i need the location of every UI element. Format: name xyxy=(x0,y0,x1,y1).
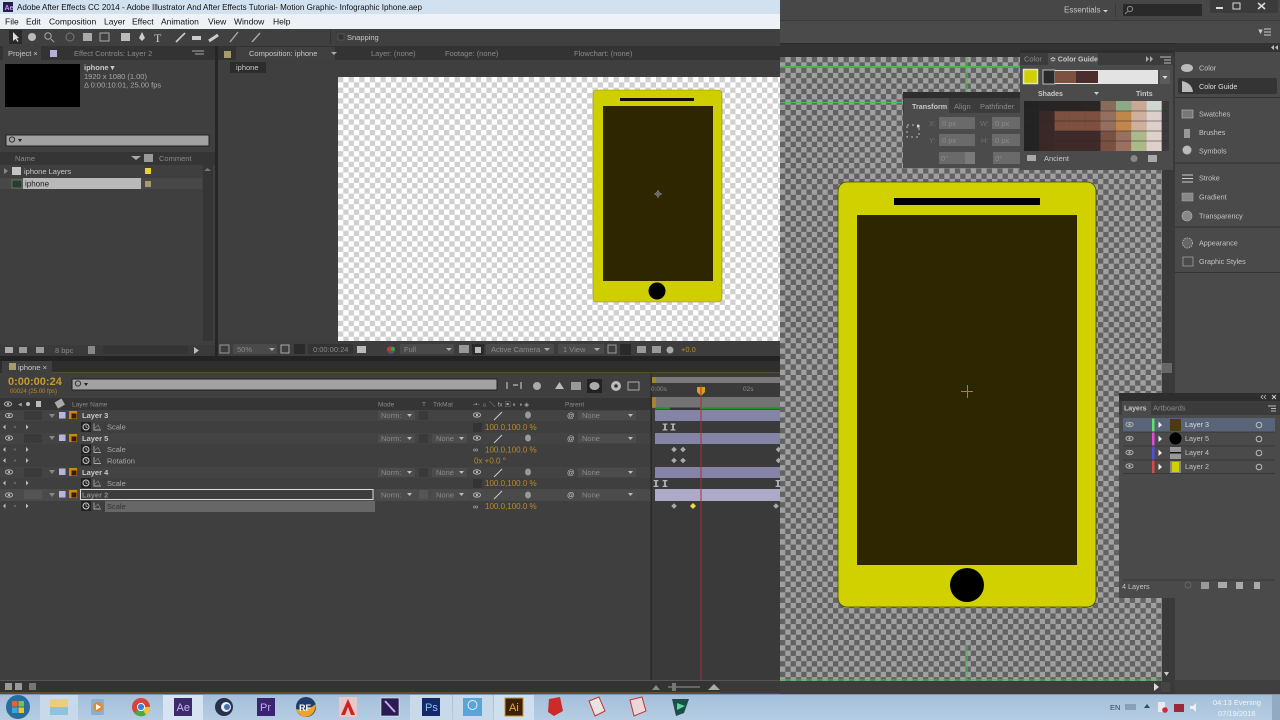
composition panel: Layer: (none) xyxy=(371,49,416,58)
dock item: Appearance xyxy=(1182,238,1238,248)
system tray: EN xyxy=(1110,703,1120,712)
layer row: Layer 4: Layer 4 xyxy=(82,468,109,477)
composition viewer footer: 50% xyxy=(237,345,252,354)
color guide panel: Tints xyxy=(1136,91,1153,98)
property row: Layer 2 Scale selected: 100.0,100.0 % xyxy=(485,502,537,511)
time ruler xyxy=(651,377,780,410)
layer row: Layer 5: None xyxy=(582,434,600,443)
After Effects menu bar: Help xyxy=(273,16,291,26)
transform panel: Y: xyxy=(929,136,936,145)
After Effects toolbar: T xyxy=(154,31,162,45)
timeline panel xyxy=(0,373,780,680)
After Effects menu bar: Layer xyxy=(104,16,125,26)
iPhone artwork in Illustrator xyxy=(838,182,1096,607)
layer row: Layer 3: None xyxy=(582,411,600,420)
dock item: Brushes: Brushes xyxy=(1199,128,1226,137)
timeline switches toolbar xyxy=(507,379,639,393)
layer row: Layer 2 selected: Layer 2 xyxy=(82,490,108,500)
layer row: Layer 2 selected: None xyxy=(582,490,600,500)
composition details xyxy=(84,63,161,90)
window buttons xyxy=(1210,0,1278,13)
layers panel: Layers xyxy=(1124,406,1147,412)
system tray: 04:13 Evening xyxy=(1213,698,1261,707)
icon: RF xyxy=(296,697,316,717)
layer row: Layer 4: Norm: xyxy=(381,468,401,477)
layer column headers: Layer Name xyxy=(72,402,108,408)
current time display: 0:00:00:24 xyxy=(8,376,63,388)
canvas scrollbars xyxy=(780,363,1172,694)
layer entry: Layer 5 xyxy=(1126,432,1262,446)
time ruler: 02s xyxy=(743,386,754,393)
layer column headers: ◂ xyxy=(18,400,22,408)
property row: Layer 5 Scale: ∞ xyxy=(473,447,478,454)
dock item: Gradient: Gradient xyxy=(1199,192,1227,202)
color guide panel xyxy=(1020,50,1173,170)
time ruler: 0:00s xyxy=(651,386,668,393)
icon: Illustrator: Ai xyxy=(509,702,519,714)
composition details: Δ 0:00:10:01, 25.00 fps xyxy=(84,80,161,90)
property row: Layer 4 Scale xyxy=(3,478,537,488)
property row: Layer 4 Scale: Scale xyxy=(107,479,126,488)
icon: Illustrator xyxy=(494,695,534,720)
dock item: Color: Color xyxy=(1199,64,1217,72)
dock item: Appearance: Appearance xyxy=(1199,238,1238,248)
icon: weather app xyxy=(453,695,493,720)
property row: Layer 5 Rotation: 0x +0.0 ° xyxy=(474,456,506,466)
property row: Layer 3 Scale xyxy=(3,422,537,432)
project search xyxy=(6,135,209,146)
layer row: Layer 2 selected: @ xyxy=(567,490,575,500)
icon: RF: RF xyxy=(299,703,311,713)
After Effects menu bar: Edit xyxy=(26,16,41,26)
composition panel: Composition: iphone xyxy=(249,49,317,58)
property row: Layer 5 Rotation xyxy=(3,456,506,466)
icon: Photoshop xyxy=(410,695,452,720)
layer entry: Layer 2: Layer 2 xyxy=(1185,462,1209,471)
property row: Layer 4 Scale: 100.0,100.0 % xyxy=(485,479,537,488)
After Effects menu bar: Composition xyxy=(49,16,97,26)
icon: Premiere: Pr xyxy=(260,702,271,714)
project panel xyxy=(0,46,215,357)
transform panel: X: xyxy=(929,119,936,128)
composition viewer footer: 1 View xyxy=(563,345,586,354)
layer row: Layer 3: @ xyxy=(567,411,575,420)
layer row: Layer 2 selected xyxy=(0,489,651,501)
layer row: Layer 4: None xyxy=(436,468,454,477)
harmony strip xyxy=(1043,70,1170,84)
current time display: 00024 (25.00 fps) xyxy=(10,389,57,395)
transform panel: Transform xyxy=(912,102,947,111)
project column headers xyxy=(0,152,215,165)
dock item: Color Guide xyxy=(1178,78,1277,94)
variation grid xyxy=(1024,101,1169,151)
After Effects menu bar xyxy=(0,14,780,29)
layer entry: Layer 4 xyxy=(1126,446,1262,460)
composition details: 1920 x 1080 (1.00) xyxy=(84,72,147,81)
transform panel: 0 px xyxy=(942,136,956,145)
project panel: Effect Controls: Layer 2 xyxy=(74,49,152,58)
layer row: Layer 4: None xyxy=(582,468,600,477)
Illustrator canvas: transparency grid xyxy=(780,57,1162,681)
current time display xyxy=(8,376,63,395)
workspace search xyxy=(1123,4,1202,16)
composition breadcrumb tab xyxy=(230,62,266,73)
After Effects menu bar: Animation xyxy=(161,16,199,26)
property row: Layer 5 Scale: Scale xyxy=(107,445,126,454)
After Effects menu bar: Effect xyxy=(132,16,154,26)
After Effects menu bar: File xyxy=(5,16,19,26)
transform panel: Pathfinder xyxy=(980,102,1015,111)
composition canvas: transparency grid xyxy=(338,77,780,341)
system tray xyxy=(1110,695,1280,720)
dock item: Stroke xyxy=(1182,174,1220,182)
artboard guides xyxy=(780,57,1162,680)
Illustrator application bar xyxy=(780,0,1280,20)
property row: Layer 5 Scale: 100.0,100.0 % xyxy=(485,446,537,454)
composition viewer footer: +0.0 xyxy=(681,345,696,354)
icon: video editor xyxy=(672,699,689,716)
dock item: Gradient xyxy=(1182,192,1227,202)
dock item: Symbols xyxy=(1182,146,1227,156)
dock item: Brushes xyxy=(1184,128,1226,138)
composition panel: Footage: (none) xyxy=(445,49,499,58)
dock item: Symbols: Symbols xyxy=(1199,146,1227,156)
timeline panel tab xyxy=(0,361,780,374)
layer row: Layer 4: @ xyxy=(567,468,575,477)
transform panel: H: xyxy=(981,136,988,145)
dock item: Color Guide: Color Guide xyxy=(1199,82,1237,91)
color guide panel: Shades xyxy=(1038,91,1063,98)
dock item: Swatches xyxy=(1182,110,1231,118)
iPhone artwork in composition xyxy=(593,90,722,302)
icon: SketchUp style builder xyxy=(630,697,646,716)
property row: Layer 5 Rotation: Rotation xyxy=(107,456,135,466)
composition panel: Flowchart: (none) xyxy=(574,49,633,58)
transform panel: Align xyxy=(954,102,971,111)
layer row: Layer 2 selected: None xyxy=(436,490,454,500)
color guide panel: Color xyxy=(1024,54,1042,64)
layer row: Layer 4 xyxy=(0,467,651,478)
icon: media player xyxy=(91,699,104,715)
composition details: iphone ▾ xyxy=(84,63,116,72)
layer column headers: Mode xyxy=(378,402,395,408)
icon: Premiere xyxy=(257,698,275,716)
icon: InDesign-style app xyxy=(381,698,399,716)
property row: Layer 2 Scale selected: Scale xyxy=(107,502,126,511)
layer row: Layer 3: Layer 3 xyxy=(82,411,108,420)
property row: Layer 3 Scale: 100.0,100.0 % xyxy=(485,423,537,432)
layer column headers xyxy=(0,398,651,410)
timeline graph area xyxy=(650,373,781,680)
composition viewer footer: Full xyxy=(404,345,416,354)
project column headers: Name xyxy=(15,154,35,163)
project item: iphone composition xyxy=(0,178,202,189)
layer column headers: Parent xyxy=(565,402,584,408)
layer column headers: TrkMat xyxy=(433,402,453,408)
property row: Layer 2 Scale selected: ∞ xyxy=(473,504,478,511)
icon: file explorer xyxy=(40,695,78,720)
composition breadcrumb tab: iphone xyxy=(236,63,259,72)
layer column headers: -•- ☼ ＼ fx ▣ ◐ ◑ ◈ xyxy=(473,400,530,408)
system tray: 07/19/2016 xyxy=(1218,709,1256,718)
composition viewer footer: Active Camera xyxy=(491,345,541,354)
layer entry: Layer 3 xyxy=(1123,418,1275,432)
transform panel: 0 px xyxy=(942,119,956,128)
After Effects title bar xyxy=(0,0,780,14)
composition panel xyxy=(218,46,780,341)
composition viewer footer: 0:00:00:24 xyxy=(313,345,348,354)
icon: AutoCAD xyxy=(339,697,357,717)
project panel: 8 bpc xyxy=(55,346,74,355)
layer row: Layer 5: Norm: xyxy=(381,434,401,443)
project column headers: Comment xyxy=(159,154,192,163)
transform panel xyxy=(903,92,1021,168)
timeline panel tab: iphone × xyxy=(18,363,47,372)
project panel: Project × xyxy=(8,49,38,58)
Illustrator control bar xyxy=(780,20,1280,43)
layer entry: Layer 5: Layer 5 xyxy=(1185,434,1209,443)
Windows taskbar xyxy=(0,694,1280,720)
icon: chrome xyxy=(132,698,150,716)
transform panel: 0 px xyxy=(995,136,1009,145)
icon: Photoshop: Ps xyxy=(425,702,438,714)
layer row: Layer 2 selected: Norm: xyxy=(381,490,401,500)
project item: iphone composition: iphone xyxy=(25,180,50,188)
dock item: Color xyxy=(1181,64,1217,72)
After Effects toolbar xyxy=(0,29,780,46)
layer entry: Layer 4: Layer 4 xyxy=(1185,448,1209,457)
dock item: Graphic Styles: Graphic Styles xyxy=(1199,257,1246,266)
composition viewer footer xyxy=(218,341,780,356)
layer duration bars xyxy=(655,410,780,501)
color guide panel: Ancient xyxy=(1044,154,1070,163)
After Effects title bar: Adobe After Effects CC 2014 - Adobe Illustrator And After Effects Tutorial- Motion Graphic- Infographic Iphone.aep xyxy=(17,2,422,12)
icon: SketchUp xyxy=(548,697,563,716)
layer row: Layer 5 xyxy=(0,433,651,444)
reference point icon xyxy=(907,125,920,137)
color guide panel: ≎ Color Guide xyxy=(1050,56,1098,64)
layer row: Layer 3: Norm: xyxy=(381,411,401,420)
After Effects toolbar: Snapping xyxy=(347,33,379,42)
property row: Layer 5 Scale xyxy=(3,444,537,454)
layers panel: Artboards xyxy=(1153,404,1186,412)
transform panel: W: xyxy=(980,119,989,128)
layer row: Layer 5: @ xyxy=(567,434,575,443)
property row: Layer 2 Scale selected xyxy=(3,501,537,512)
transform panel: 0° xyxy=(995,154,1002,163)
dock item: Stroke: Stroke xyxy=(1199,174,1220,182)
layer row: Layer 5: None xyxy=(436,434,454,443)
dock item: Transparency xyxy=(1182,211,1243,221)
property row: Layer 3 Scale: Scale xyxy=(107,422,126,432)
Illustrator application bar: Essentials xyxy=(1064,6,1100,14)
dock item: Transparency: Transparency xyxy=(1199,212,1243,220)
After Effects menu bar: View xyxy=(208,16,227,26)
project item: iphone Layers folder xyxy=(4,167,151,176)
base color swatch xyxy=(1024,70,1038,84)
playhead xyxy=(697,385,705,680)
dock item: Swatches: Swatches xyxy=(1199,110,1231,118)
Illustrator right dock xyxy=(1175,43,1280,680)
icon: start button xyxy=(6,695,30,719)
layer entry: Layer 2 xyxy=(1126,460,1262,474)
layer entry: Layer 3: Layer 3 xyxy=(1185,420,1209,429)
keyframes xyxy=(654,424,781,509)
project thumbnail xyxy=(5,64,80,107)
layers panel xyxy=(1119,393,1280,598)
icon: After Effects: Ae xyxy=(176,702,190,714)
timeline search field xyxy=(72,379,497,390)
After Effects menu bar: Window xyxy=(234,16,265,26)
layer row: Layer 5: Layer 5 xyxy=(82,434,108,443)
After Effects title bar: Ae xyxy=(4,5,14,12)
layers panel: 4 Layers xyxy=(1122,582,1150,591)
transform panel: 0° xyxy=(941,154,948,163)
transform panel: 0 px xyxy=(995,119,1009,128)
icon: After Effects xyxy=(163,695,203,720)
layer column headers: T xyxy=(422,402,426,408)
project item: iphone Layers folder: iphone Layers xyxy=(24,167,71,176)
timeline status bar xyxy=(0,680,780,694)
icon: Cinema 4D xyxy=(215,698,233,716)
icon: SketchUp layout xyxy=(589,697,605,716)
layer row: Layer 3 xyxy=(0,410,651,421)
